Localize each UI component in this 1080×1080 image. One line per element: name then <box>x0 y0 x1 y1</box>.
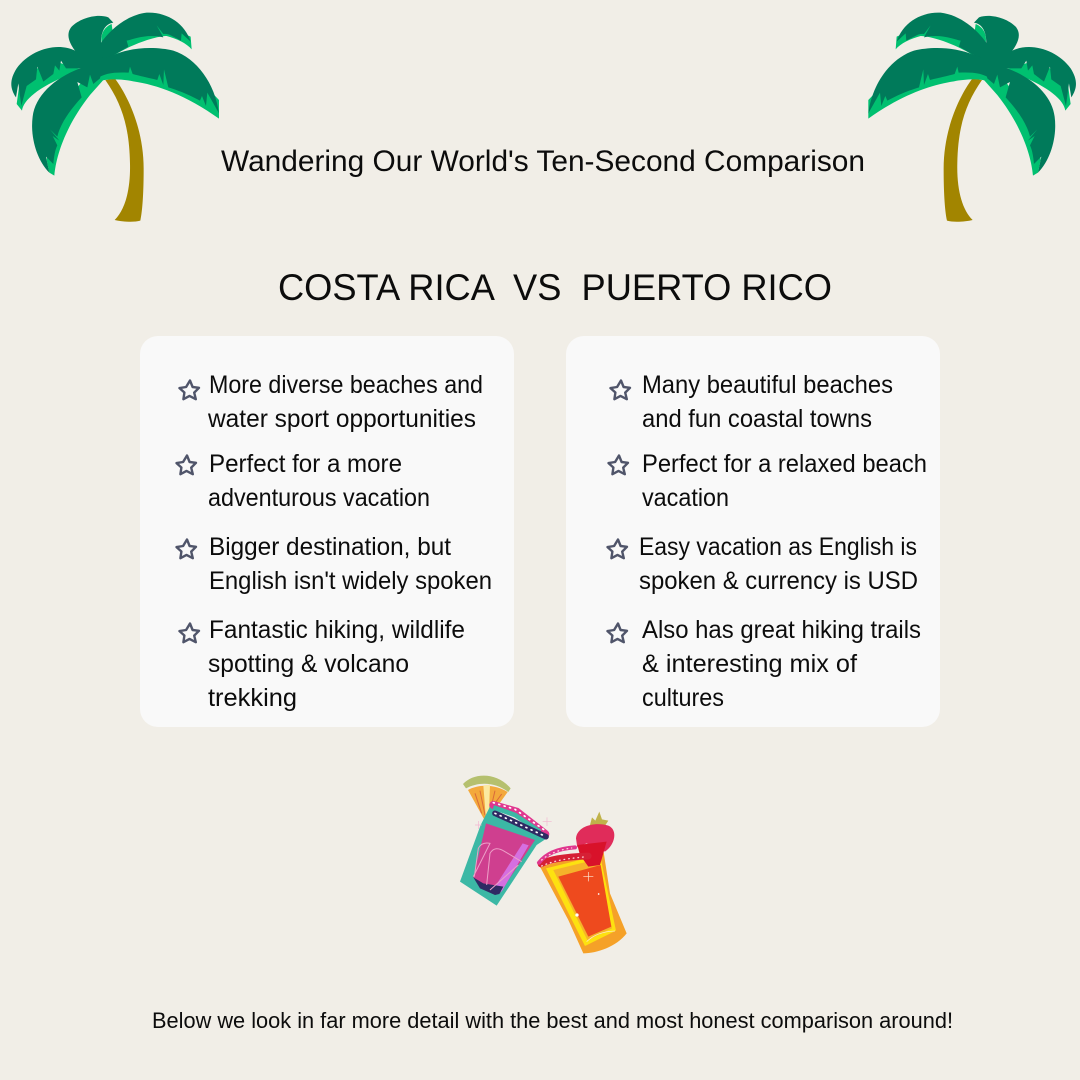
item: relaxed: Perfect for a relaxed beach <box>642 450 927 478</box>
item: hiking: Fantastic hiking, wildlife <box>209 616 465 644</box>
item: hiking: spotting & volcano <box>208 650 409 678</box>
icon: left palm tree <box>11 13 219 222</box>
title: Wandering Our World's Ten-Second Comparison <box>221 145 865 178</box>
item: hiking: & interesting mix of <box>642 650 857 678</box>
item: relaxed: vacation <box>642 484 729 512</box>
item: easy <box>608 533 918 595</box>
panel: Puerto Rico <box>566 336 940 727</box>
icon: right palm tree <box>868 13 1076 222</box>
item: beaches <box>180 371 483 433</box>
footer text: Below we look in far more detail with the best and most honest comparison around! <box>152 1008 953 1033</box>
item: hiking: trekking <box>208 684 297 712</box>
item: beaches: and fun coastal towns <box>642 405 872 433</box>
item: destination: English isn't widely spoken <box>209 567 492 595</box>
item: adventure: Perfect for a more <box>209 450 402 478</box>
item: hiking <box>608 616 921 712</box>
item: relaxed <box>608 450 927 512</box>
item: beaches: Many beautiful beaches <box>642 371 893 399</box>
panel: Costa Rica <box>140 336 514 727</box>
item: beaches: More diverse beaches and <box>209 371 483 399</box>
item: destination <box>176 533 492 595</box>
item: beaches <box>610 371 893 433</box>
item: hiking: cultures <box>642 684 724 712</box>
item: beaches: water sport opportunities <box>207 405 476 433</box>
icon: pink cocktail <box>460 776 552 906</box>
main heading: COSTA RICA VS PUERTO RICO <box>278 267 832 308</box>
item: destination: Bigger destination, but <box>209 533 451 561</box>
icon: cocktails <box>460 776 627 953</box>
item: adventure <box>176 450 430 512</box>
icon: red cocktail <box>539 812 627 953</box>
item: hiking: Also has great hiking trails <box>642 616 921 644</box>
item: hiking <box>180 616 465 712</box>
item: easy: Easy vacation as English is <box>639 533 917 561</box>
item: easy: spoken & currency is USD <box>639 567 918 595</box>
item: adventure: adventurous vacation <box>208 484 430 512</box>
